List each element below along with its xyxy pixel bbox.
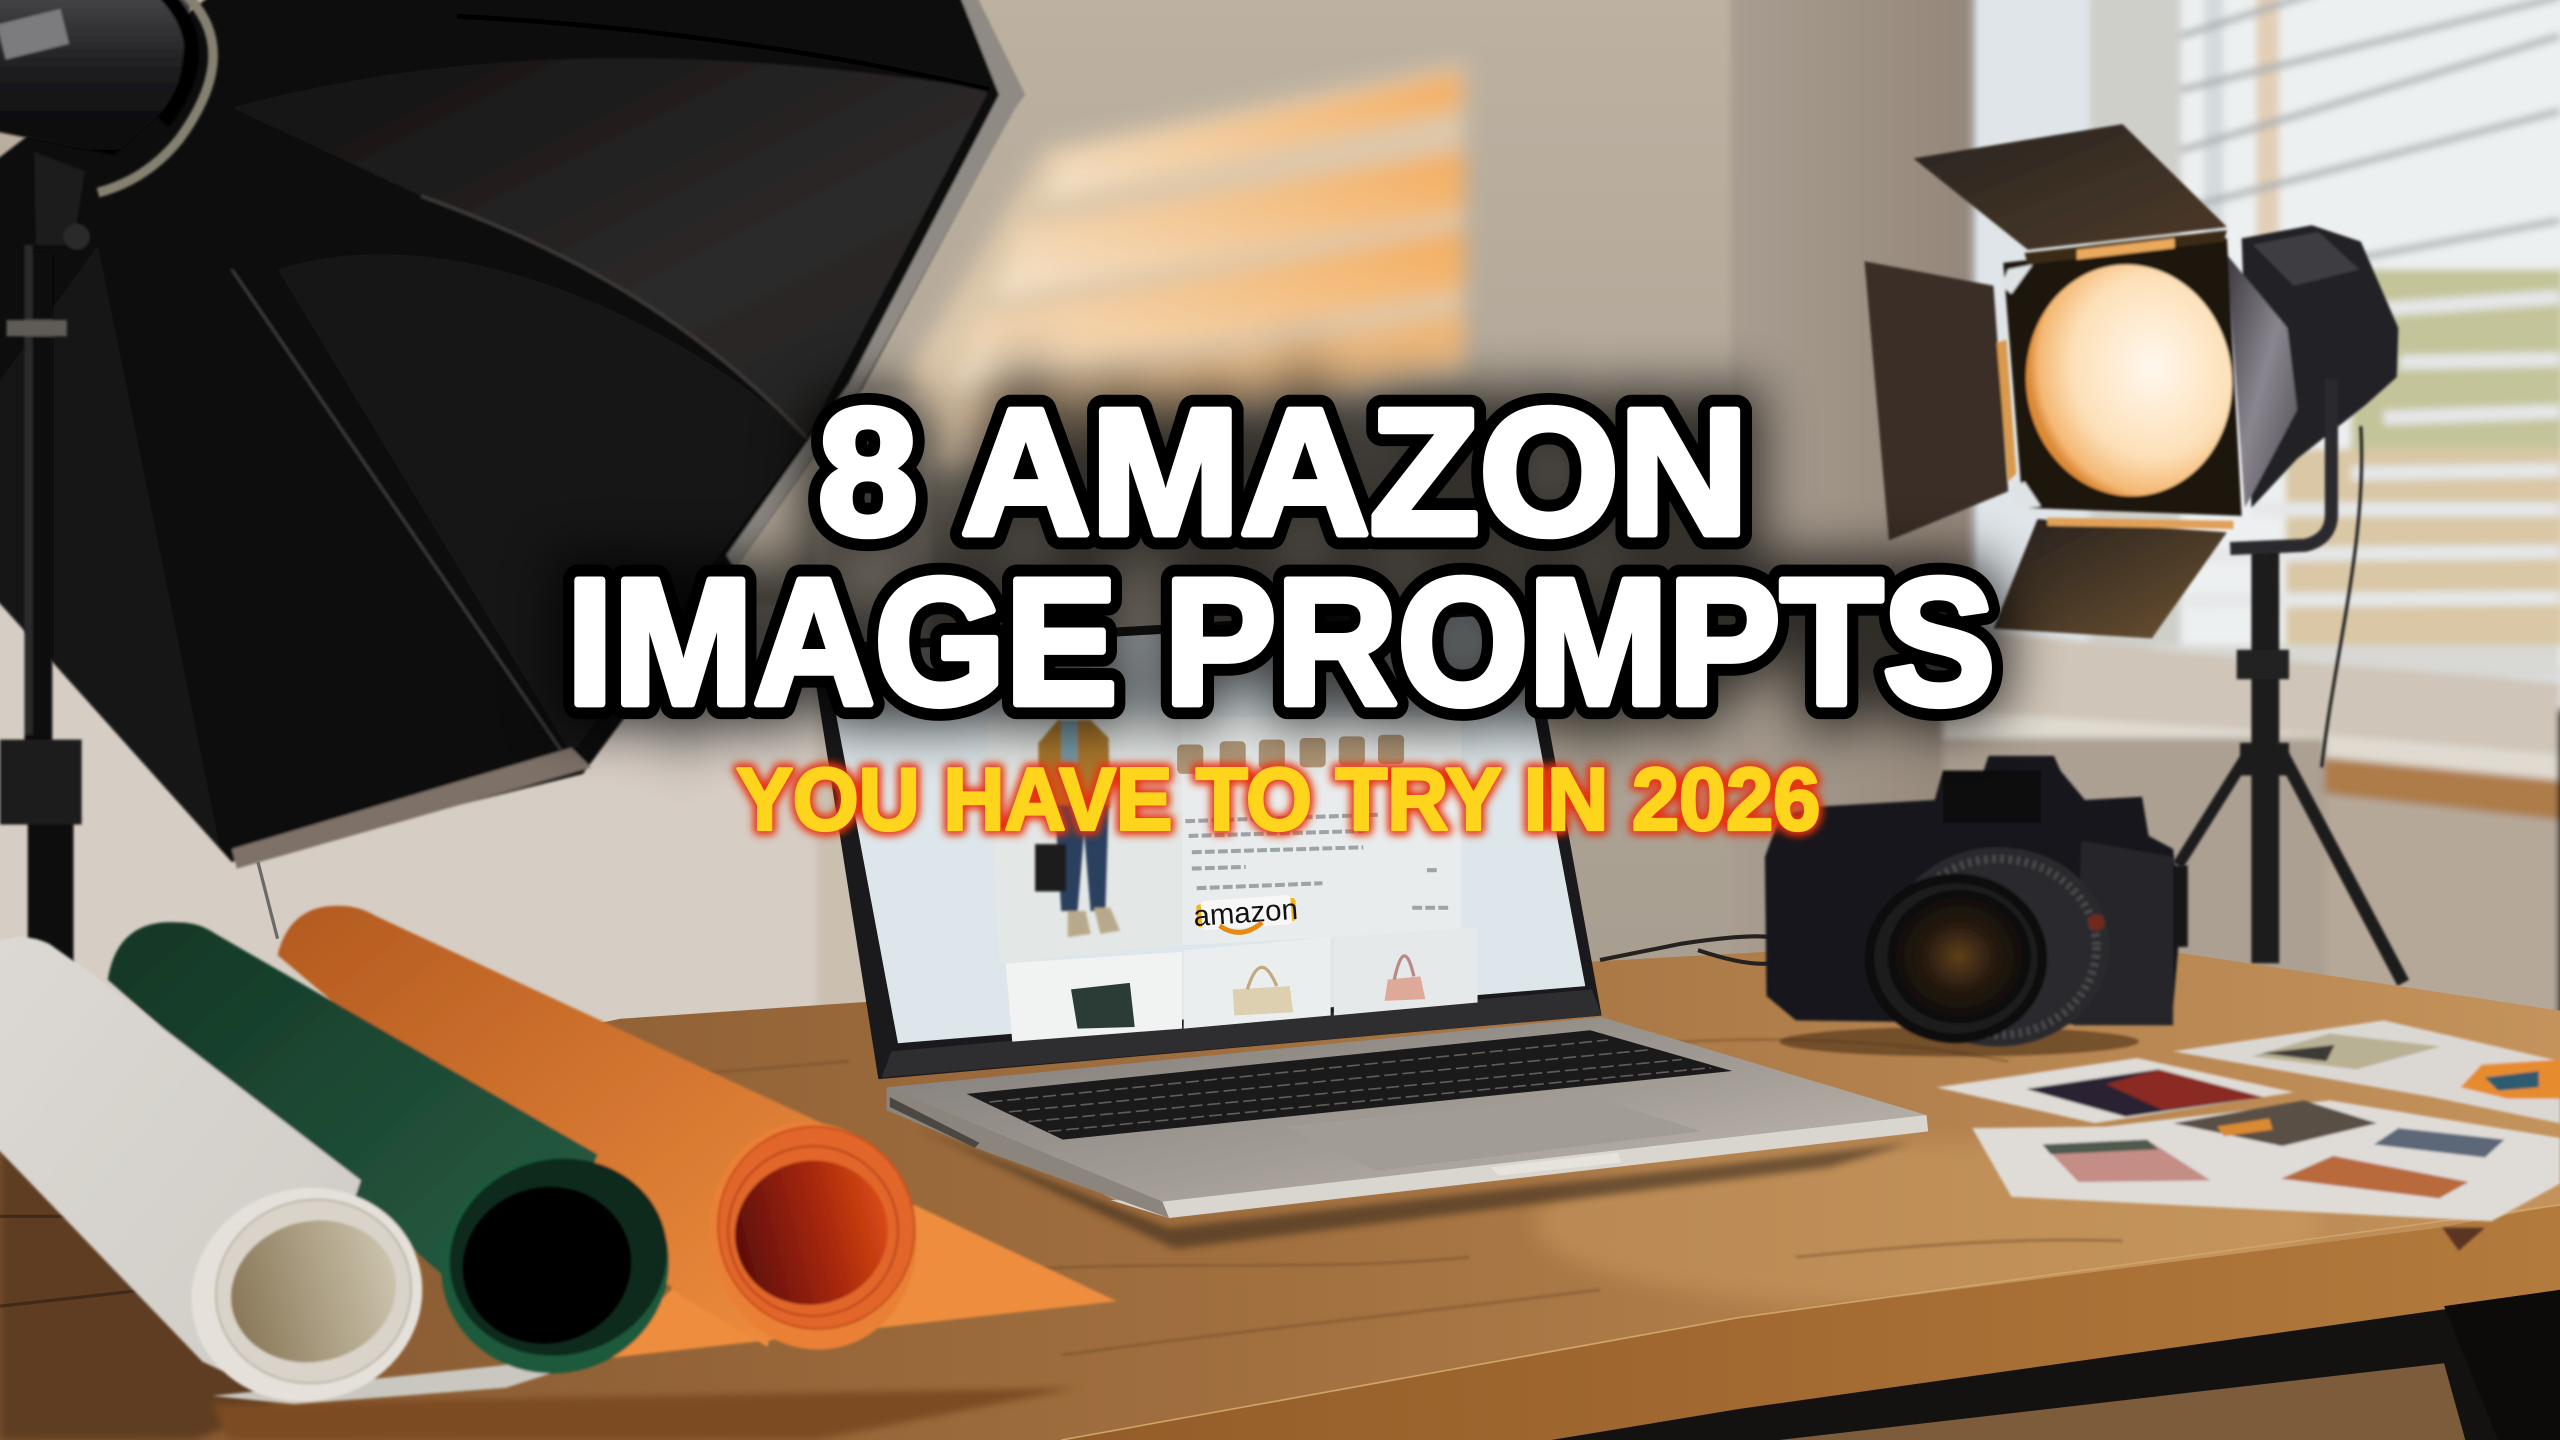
desk front edge	[1061, 1205, 2560, 1440]
screen	[824, 614, 1585, 1043]
model on screen	[1035, 720, 1120, 937]
desk highlight	[1535, 1143, 2318, 1306]
keyboard	[967, 1030, 1732, 1140]
dark glow behind title: IMAGE PROMPTS	[567, 542, 1995, 743]
orange sheet	[606, 1205, 1117, 1358]
wooden desk	[0, 952, 2560, 1440]
back wall	[0, 0, 1976, 1159]
background cable	[1600, 936, 1771, 964]
housing	[2242, 225, 2398, 508]
bags on screen	[1071, 983, 1135, 1029]
softbox far-left panel	[0, 245, 220, 849]
title: IMAGE PROMPTS	[567, 542, 1995, 743]
photo sheet upper	[2173, 1020, 2560, 1123]
product photos on desk	[1936, 1020, 2560, 1251]
white roll	[0, 937, 445, 1426]
trackpad	[1285, 1096, 1701, 1171]
left barn door	[1864, 261, 2008, 540]
laptop	[810, 604, 1928, 1249]
top barn door	[1913, 124, 2227, 250]
laptop shadow	[914, 1127, 1910, 1249]
camera	[1765, 756, 2188, 1056]
window with blinds	[1943, 0, 2560, 1020]
paper rolls	[0, 906, 1117, 1426]
green roll	[108, 922, 692, 1398]
softbox	[0, 0, 1025, 869]
title: IMAGE PROMPTS	[567, 542, 1995, 743]
subtitle: YOU HAVE TO TRY IN 2026	[736, 749, 1820, 848]
window sill	[1974, 629, 2560, 754]
listing text lines	[1185, 815, 1450, 908]
dark glow behind title	[567, 372, 1995, 743]
softbox lower panel	[278, 254, 807, 754]
title: 8 AMAZON	[818, 372, 1749, 573]
camera body	[1765, 756, 2181, 1025]
photo sheet lower	[1972, 1100, 2560, 1221]
lens barrel	[1887, 847, 2109, 1047]
photo sheet middle	[1936, 1058, 2294, 1123]
screen bezel	[810, 604, 1602, 1079]
power cord behind softbox	[258, 862, 278, 939]
side ports	[890, 1097, 980, 1148]
spotlight with barn doors	[1864, 124, 2398, 638]
title: 8 AMAZON	[818, 372, 1749, 573]
orange roll	[278, 906, 941, 1372]
back tripod	[2178, 426, 2403, 983]
dark glow behind title: 8 AMAZON	[818, 372, 1749, 573]
desk frame	[1551, 1293, 2560, 1440]
subtitle: YOU HAVE TO TRY IN 2026	[736, 749, 1820, 848]
swatches on screen	[1177, 735, 1404, 774]
softbox rim	[727, 0, 1025, 568]
softbox upper panel	[232, 58, 989, 438]
left stand and light head	[0, 0, 213, 963]
lens front	[1864, 873, 2047, 1043]
sunlight patch on wall	[906, 62, 1464, 473]
amazon logo: amazon	[1192, 893, 1299, 933]
title	[567, 372, 1995, 743]
laptop base	[887, 1017, 1927, 1218]
camera shadow	[1780, 1027, 2139, 1056]
front frame	[2003, 238, 2242, 516]
bottom barn door	[1993, 519, 2227, 638]
